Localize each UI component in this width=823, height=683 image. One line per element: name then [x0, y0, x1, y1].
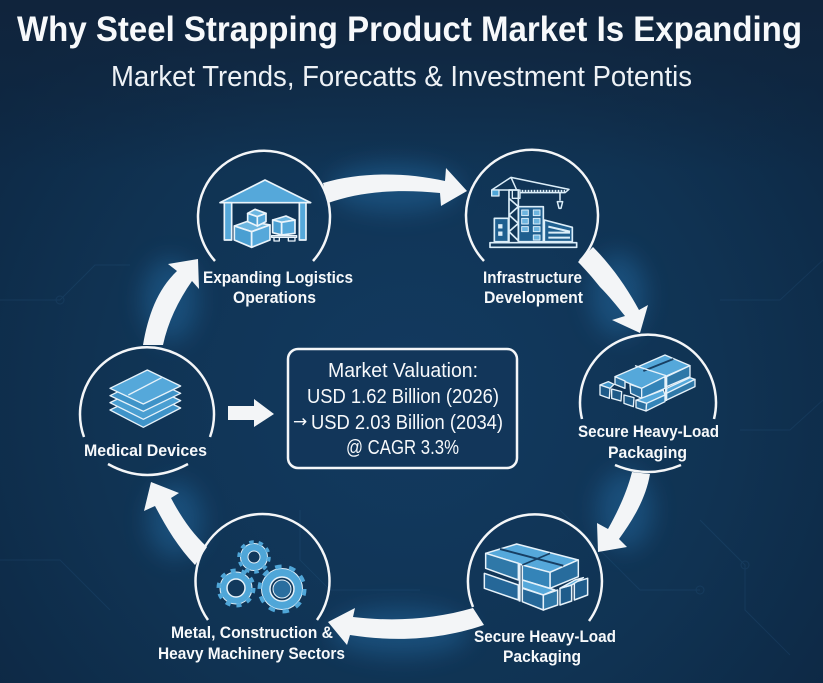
label: Expanding Logistics — [203, 268, 353, 287]
label: Secure Heavy-Load — [474, 627, 616, 646]
arrow: packaging to metal sectors — [328, 608, 484, 645]
icon: steel bars — [600, 355, 695, 411]
arrow: infrastructure to heavy-load packaging — [578, 247, 648, 333]
icon: crane and buildings — [490, 177, 577, 247]
node: infrastructure development — [466, 150, 598, 307]
node: metal, construction and heavy machinery sectors: Heavy Machinery Sectors — [158, 644, 345, 663]
node: secure heavy-load packaging (upper): Packaging — [608, 443, 687, 462]
arrow: logistics to infrastructure — [323, 168, 467, 206]
ring — [198, 151, 330, 261]
label: Infrastructure — [483, 268, 582, 287]
label: Metal, Construction & — [171, 623, 333, 642]
node: expanding logistics operations: Operations — [233, 288, 316, 307]
icon: stacked sheets — [110, 370, 181, 427]
ring — [80, 347, 214, 475]
arrow: medical devices to logistics — [143, 259, 199, 345]
ring — [466, 150, 598, 261]
icon: warehouse — [220, 180, 311, 247]
ring — [196, 514, 330, 620]
arrow: packaging to second packaging — [597, 472, 650, 552]
ring — [580, 335, 716, 472]
panel: market valuation: USD 1.62 Billion (2026) — [307, 386, 499, 408]
node: metal, construction and heavy machinery sectors — [158, 514, 345, 663]
panel: market valuation — [288, 349, 517, 468]
panel: market valuation: @ CAGR 3.3% — [346, 437, 459, 459]
label: Medical Devices — [84, 441, 207, 460]
subtitle: Market Trends, Forecatts & Investment Potentis — [111, 61, 692, 93]
label: Secure Heavy-Load — [578, 422, 719, 441]
ring — [468, 514, 602, 621]
node: medical devices — [80, 347, 214, 475]
arrow: metal sectors to medical devices — [144, 482, 207, 565]
icon: steel bars — [484, 544, 588, 610]
node: secure heavy-load packaging (lower): Packaging — [503, 647, 581, 666]
valuation text: Market Valuation: — [328, 360, 478, 382]
node: infrastructure development: Development — [484, 288, 583, 307]
node: secure heavy-load packaging (upper) — [578, 335, 719, 472]
panel: market valuation: USD 2.03 Billion (2034) — [311, 412, 503, 434]
node: secure heavy-load packaging (lower) — [468, 514, 616, 666]
icon: gears — [218, 542, 304, 612]
node: expanding logistics operations — [198, 151, 353, 307]
panel: market valuation: → — [293, 412, 307, 432]
arrow: medical devices to market valuation — [228, 399, 274, 427]
